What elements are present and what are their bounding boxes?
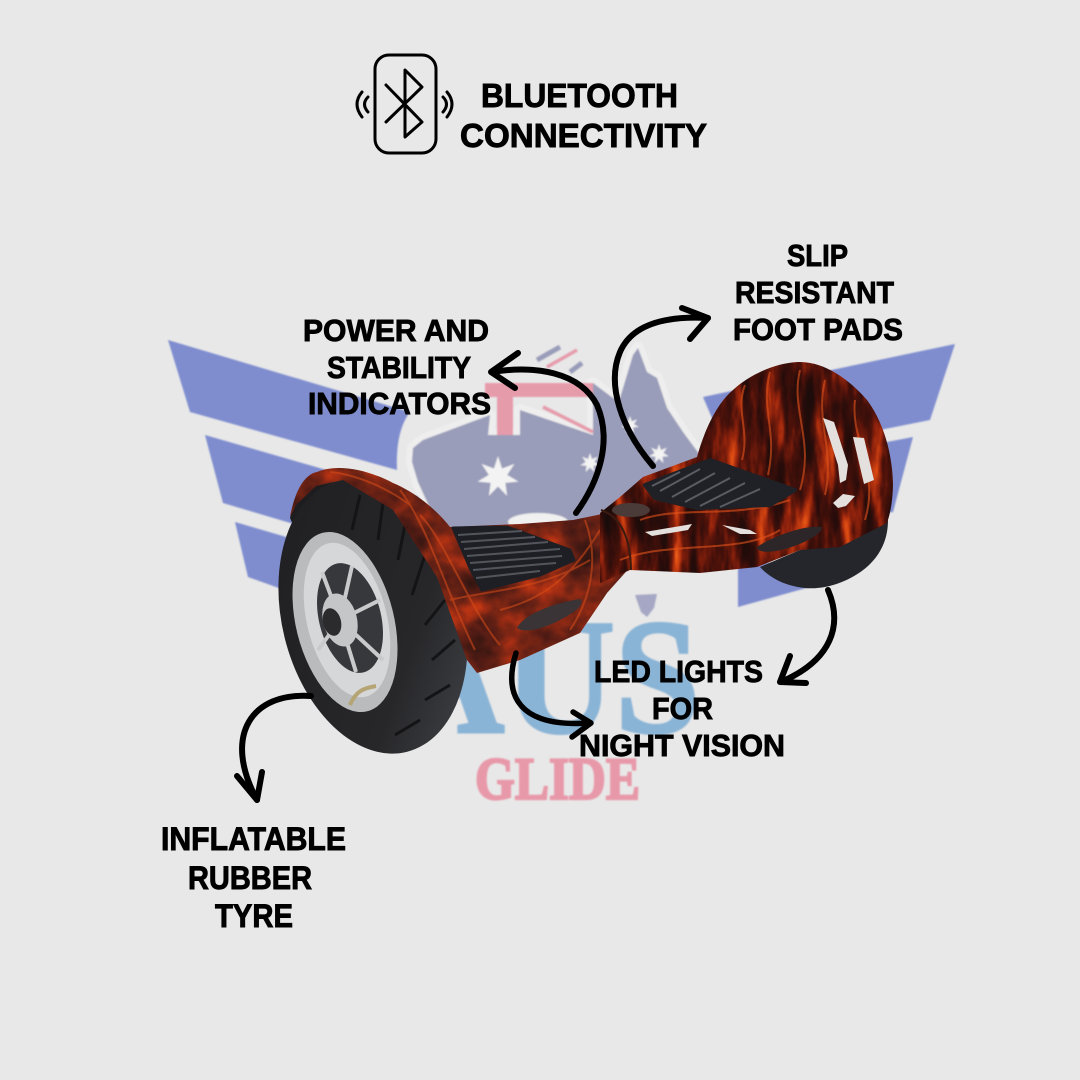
right body with flames bbox=[595, 355, 900, 590]
label: slip resistant foot pads: RESISTANT bbox=[735, 275, 894, 310]
label: bluetooth connectivity: BLUETOOTH bbox=[481, 77, 678, 114]
left foot pad bbox=[453, 527, 574, 590]
label: led lights for night vision: LED LIGHTS bbox=[594, 654, 763, 689]
label: bluetooth connectivity bbox=[460, 77, 707, 154]
logo word: AUS: AUS bbox=[394, 587, 700, 768]
logo word: GLIDE: GLIDE bbox=[475, 746, 640, 812]
joint button dark bbox=[612, 503, 650, 517]
far wheel bbox=[760, 520, 888, 588]
right wing bbox=[703, 344, 955, 607]
label: power and stability indicators bbox=[303, 313, 491, 421]
wheel rim bbox=[275, 521, 415, 723]
southern coast gap bbox=[508, 513, 568, 531]
arrow: slip resistant foot pads bbox=[615, 308, 708, 466]
label: slip resistant foot pads: FOOT PADS bbox=[733, 312, 903, 347]
label: led lights for night vision: NIGHT VISION bbox=[579, 728, 785, 763]
label: led lights for night vision bbox=[579, 654, 785, 763]
hoverboard bbox=[278, 362, 893, 754]
label: led lights for night vision: FOR bbox=[652, 691, 713, 726]
icon: bluetooth bbox=[357, 55, 452, 153]
arrow: led lights right bbox=[780, 590, 834, 683]
tasmania bbox=[635, 594, 657, 617]
infographic canvas bbox=[162, 54, 956, 928]
label: power and stability indicators: POWER AND bbox=[303, 313, 489, 348]
logo watermark bbox=[168, 340, 955, 812]
label: bluetooth connectivity: CONNECTIVITY bbox=[460, 117, 707, 154]
joint bbox=[601, 510, 631, 570]
label: inflatable rubber tyre: INFLATABLE bbox=[161, 821, 346, 857]
near tyre bbox=[251, 458, 495, 774]
flag canton bbox=[485, 347, 593, 435]
arrow: power and stability indicators bbox=[491, 353, 604, 513]
label: inflatable rubber tyre bbox=[161, 821, 346, 934]
label: inflatable rubber tyre: RUBBER bbox=[188, 860, 312, 896]
right foot pad bbox=[645, 460, 795, 508]
label: inflatable rubber tyre: TYRE bbox=[215, 898, 293, 934]
reflections bbox=[645, 418, 874, 536]
arrow: led lights bottom bbox=[512, 653, 591, 737]
label: slip resistant foot pads: SLIP bbox=[787, 238, 848, 273]
left body with flames bbox=[290, 468, 626, 673]
left wing bbox=[168, 340, 420, 592]
valve bbox=[350, 686, 376, 705]
right dark panel bbox=[757, 527, 822, 552]
left dark panel bbox=[517, 599, 582, 630]
label: slip resistant foot pads bbox=[733, 238, 903, 347]
label: power and stability indicators: STABILITY bbox=[327, 350, 471, 385]
australia map bbox=[412, 348, 700, 560]
stars bbox=[478, 416, 669, 496]
label: power and stability indicators: INDICATORS bbox=[308, 386, 491, 421]
arrow: inflatable rubber tyre bbox=[237, 696, 311, 800]
